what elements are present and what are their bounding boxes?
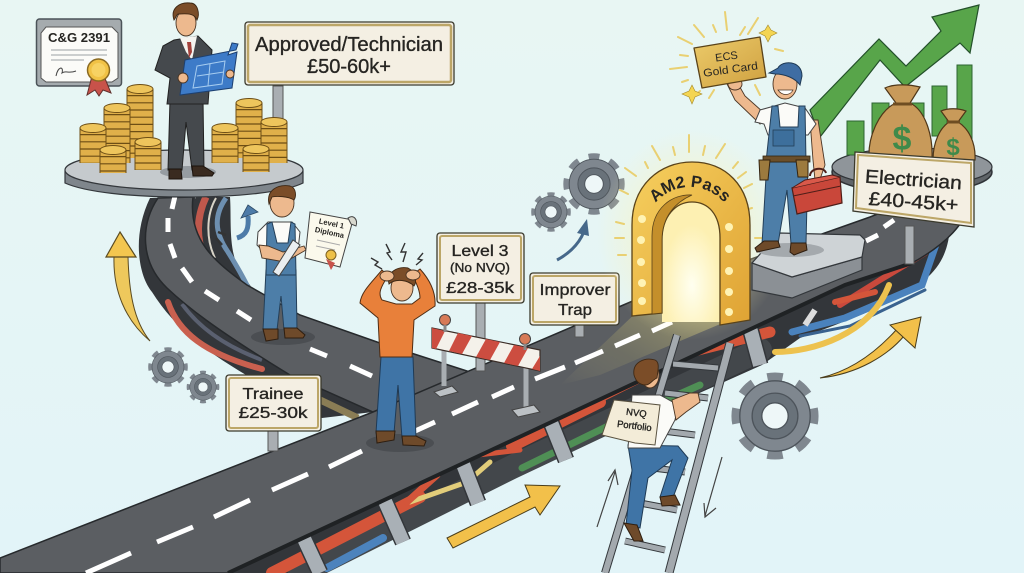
light spill on road xyxy=(560,268,750,385)
coin stacks right xyxy=(212,98,287,172)
hair xyxy=(389,268,416,286)
person: electrician xyxy=(727,63,825,255)
icon: large money bag xyxy=(869,85,932,158)
icon: gear medium xyxy=(567,157,621,211)
legs xyxy=(263,270,297,330)
shoes xyxy=(169,166,214,179)
person: stressed man xyxy=(360,243,435,446)
arrow: blue near gears xyxy=(557,219,589,260)
sign: Trainee: Trainee xyxy=(242,386,304,403)
boots xyxy=(755,241,807,255)
jeans xyxy=(376,357,416,438)
shoes xyxy=(376,431,426,446)
road black underside edge xyxy=(228,263,912,573)
icon: gear left lower xyxy=(189,373,217,401)
sign: Trainee: £25-30k xyxy=(238,405,309,422)
road: main section xyxy=(0,199,966,573)
sign: Improver Trap xyxy=(530,273,619,337)
rays: arch xyxy=(615,135,764,255)
person: climber with NVQ portfolio xyxy=(602,359,700,541)
icon: small money bag xyxy=(933,109,975,161)
glow: arch halo xyxy=(597,130,787,340)
shoes xyxy=(263,328,305,341)
head xyxy=(641,362,659,388)
tool pouches xyxy=(759,160,808,180)
right disc behind electrician sign xyxy=(832,148,992,193)
arm xyxy=(259,245,306,262)
icon: certificate C&G 2391: C&G 2391 xyxy=(48,31,110,45)
top platform xyxy=(65,150,303,197)
icon: gold card: ECS xyxy=(715,50,739,65)
cap xyxy=(769,63,802,85)
rays: gold card xyxy=(670,12,783,98)
sign: Level 3 (No NVQ): Level 3 xyxy=(452,243,509,260)
shirt and tie xyxy=(180,36,197,60)
belt xyxy=(763,156,810,162)
hair xyxy=(269,186,295,204)
legs xyxy=(168,100,204,170)
blueprint xyxy=(180,43,238,95)
head xyxy=(773,69,797,99)
bib and straps xyxy=(766,106,806,162)
shirt xyxy=(755,103,816,135)
sparkle left xyxy=(682,85,702,104)
arrow: yellow left curved up xyxy=(106,232,150,341)
cables under upper road xyxy=(139,196,373,418)
arrow: bottom yellow xyxy=(447,485,560,548)
rolled paper xyxy=(273,240,300,276)
sign: Level 3 post xyxy=(476,303,485,371)
jeans xyxy=(626,445,688,528)
sign: Electrician: £40-45k+ xyxy=(868,189,959,216)
inner light xyxy=(662,200,722,322)
barrier xyxy=(432,314,540,417)
ladder xyxy=(605,335,730,573)
sign: Improver Trap: Improver xyxy=(540,282,611,299)
sign: Level 3 (No NVQ): £28-35k xyxy=(446,280,515,297)
sign: Electrician xyxy=(853,152,974,264)
icon: diploma scroll: Level 1 xyxy=(318,217,345,231)
arrow: right yellow xyxy=(820,317,921,378)
thin arrow up by ladder xyxy=(597,470,618,527)
coin stacks left xyxy=(80,84,161,173)
shirt and arms xyxy=(360,269,435,357)
arch body xyxy=(632,162,750,325)
hands xyxy=(380,271,394,281)
hair xyxy=(173,3,198,20)
icon: gold card xyxy=(694,37,766,88)
stress marks xyxy=(371,243,423,269)
icon: gear left upper xyxy=(151,350,185,384)
person: approved technician in suit with blueprint xyxy=(155,3,238,179)
icon: small money bag: $ xyxy=(946,134,960,161)
sign: Approved/Technician: £50-60k+ xyxy=(307,56,391,78)
arch text: AM2 Pass xyxy=(651,176,729,202)
icon: toolbox xyxy=(792,169,842,214)
arm xyxy=(672,393,700,420)
icon: diploma scroll: Diploma xyxy=(314,225,346,240)
head xyxy=(270,189,294,217)
bib xyxy=(266,222,296,275)
icon: gold card: Gold Card xyxy=(703,60,759,80)
thin arrow down by ladder xyxy=(704,457,722,517)
person: trainee with diploma xyxy=(251,186,315,345)
raised arm xyxy=(727,82,763,124)
legs xyxy=(762,160,808,244)
sign: Approved/Technician xyxy=(245,22,454,85)
right arm xyxy=(810,120,825,182)
bulbs xyxy=(637,215,733,316)
sign: Approved/Technician: Approved/Technician xyxy=(255,34,443,56)
portfolio xyxy=(602,400,660,445)
green bars xyxy=(847,65,972,155)
shirt xyxy=(257,222,300,250)
shadow: stressed man xyxy=(366,434,434,452)
hair xyxy=(634,359,658,385)
cable bundle under main road xyxy=(228,225,950,573)
sign: Level 3 (No NVQ): (No NVQ) xyxy=(450,261,510,275)
icon: gear large xyxy=(737,378,813,454)
rungs xyxy=(625,364,718,550)
sign: Level 3 (No NVQ) xyxy=(437,233,524,303)
icon: diploma scroll xyxy=(305,212,357,270)
sign: Improver Trap: Trap xyxy=(558,302,592,319)
shadow xyxy=(251,329,315,345)
shirt xyxy=(628,395,678,448)
reveal xyxy=(652,195,692,314)
shoes xyxy=(624,495,680,541)
sign: Trainee xyxy=(226,375,321,451)
icon: certificate C&G 2391 xyxy=(36,19,122,96)
arch: AM2 Pass xyxy=(631,161,751,326)
green growth arrow xyxy=(810,5,979,137)
person: climber with NVQ portfolio: Portfolio xyxy=(616,419,652,434)
sign post: approved xyxy=(273,86,283,120)
sign: Electrician: Electrician xyxy=(864,167,962,194)
person: climber with NVQ portfolio: NVQ xyxy=(625,407,647,420)
near rail xyxy=(669,343,730,573)
hand holding card xyxy=(728,78,742,90)
jacket xyxy=(155,36,212,104)
far rail xyxy=(605,335,677,573)
head xyxy=(391,275,413,301)
road lane dashes xyxy=(86,196,894,573)
road: upper curved section xyxy=(145,197,470,412)
stone platform xyxy=(752,233,865,298)
sparkle right xyxy=(759,25,777,42)
hands xyxy=(178,73,188,83)
arrow: blue near trainee xyxy=(237,205,258,238)
icon: gear small xyxy=(534,195,568,229)
head xyxy=(176,10,196,36)
icon: large money bag: $ xyxy=(893,120,912,158)
